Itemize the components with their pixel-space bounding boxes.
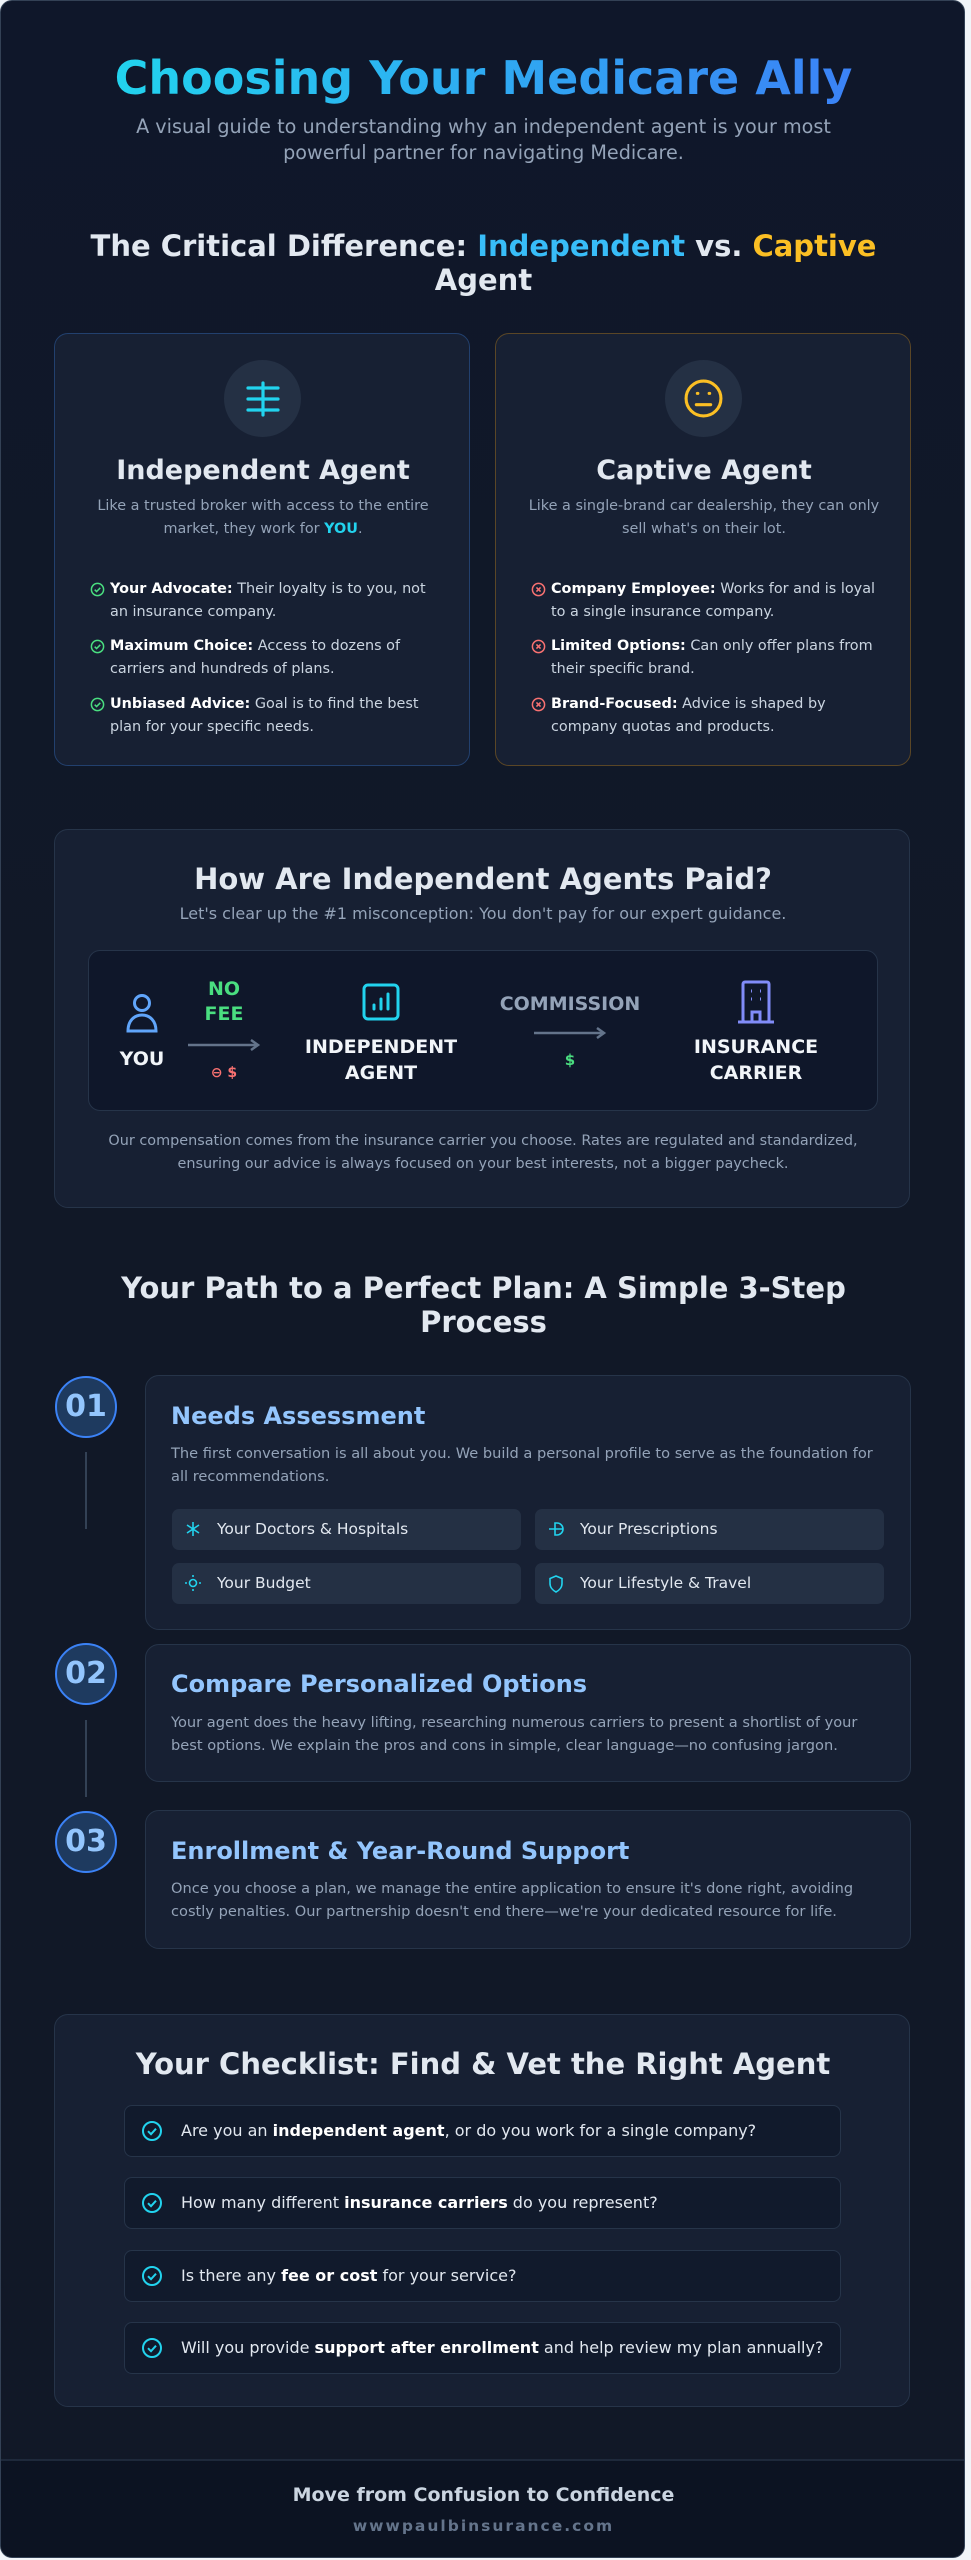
icon: independent — [224, 360, 301, 437]
step description: Once you choose a plan, we manage the entire application to ensure it's done right, avoiding costly penalties. Our partnership doesn't end there—we're your dedicated resource for life. — [171, 1880, 853, 1920]
heading: 3-step process: Your Path to a Perfect Plan: A Simple 3-Step Process — [121, 1271, 846, 1339]
checklist item 4: Will you provide support after enrollment and help review my plan annually? — [181, 2338, 823, 2357]
step 2 number — [55, 1643, 117, 1705]
no fee label — [205, 978, 243, 1025]
tile: prescriptions — [535, 1509, 884, 1550]
step 1 number: 01 — [65, 1389, 107, 1424]
icon: neutral face — [665, 360, 742, 437]
arrow — [188, 1039, 260, 1051]
step title: Needs Assessment — [171, 1402, 425, 1430]
step 2 card — [145, 1644, 911, 1782]
step title: Compare Personalized Options — [171, 1670, 587, 1698]
bullet list — [532, 581, 875, 734]
description: Like a single-brand car dealership, they can only sell what's on their lot. — [529, 498, 879, 536]
panel: captive agent — [495, 333, 911, 766]
step title: Enrollment & Year-Round Support — [171, 1837, 629, 1865]
explanation text: Our compensation comes from the insurance carrier you choose. Rates are regulated and standardized, ensuring our advice is always focused on your best interests, not a bigger paycheck. — [108, 1133, 858, 1172]
checklist item 2 — [124, 2177, 841, 2229]
bullet list: Company Employee: Works for and is loyal to a single insurance company. — [551, 581, 875, 620]
step 1 card — [145, 1375, 911, 1630]
footer url: wwwpaulbinsurance.com — [353, 2517, 614, 2535]
bullet list — [90, 581, 426, 734]
panel: how agents are paid — [54, 829, 910, 1208]
checklist item 3: Is there any fee or cost for your service? — [181, 2266, 516, 2285]
label: insurance carrier: CARRIER — [710, 1062, 802, 1084]
heading: How Are Independent Agents Paid? — [194, 862, 772, 896]
subheading: Let's clear up the #1 misconception: You don't pay for our expert guidance. — [180, 904, 786, 923]
tile: lifestyle: Your Lifestyle & Travel — [580, 1574, 751, 1592]
money icon: $ — [565, 1051, 575, 1069]
step 1 number — [55, 1376, 117, 1438]
step description: Your agent does the heavy lifting, researching numerous carriers to present a shortlist of your best options. We explain the pros and cons in simple, clear language—no confusing jargon. — [171, 1714, 857, 1754]
tile: budget: Your Budget — [217, 1574, 311, 1592]
label: independent agent: INDEPENDENT — [305, 1036, 457, 1058]
icon: person — [126, 994, 158, 1032]
footer tagline: Move from Confusion to Confidence — [293, 2484, 674, 2506]
no money icon: ⊖ $ — [211, 1065, 237, 1081]
tile: lifestyle — [535, 1563, 884, 1604]
checklist item 1 — [124, 2105, 841, 2157]
tile: budget — [172, 1563, 521, 1604]
label: insurance carrier — [694, 1036, 818, 1084]
tile: doctors: Your Doctors & Hospitals — [217, 1520, 408, 1538]
step 3 card — [145, 1810, 911, 1949]
bullet list: Brand-Focused: Advice is shaped by company quotas and products. — [551, 696, 826, 734]
commission label: COMMISSION — [500, 993, 640, 1015]
subtitle: A visual guide to understanding why an independent agent is your most powerful partner for navigating Medicare. — [136, 115, 831, 164]
label: insurance carrier: INSURANCE — [694, 1036, 818, 1058]
step 3 number — [55, 1811, 117, 1873]
bullet list: Unbiased Advice: Goal is to find the best plan for your specific needs. — [110, 696, 419, 734]
checklist item 1: Are you an independent agent, or do you work for a single company? — [181, 2121, 756, 2140]
footer — [1, 2459, 966, 2559]
label: you: YOU — [120, 1048, 164, 1070]
icon: building — [738, 980, 774, 1024]
no fee label: NO — [208, 978, 240, 1000]
label: independent agent — [305, 1036, 457, 1084]
checklist item 2: How many different insurance carriers do you represent? — [181, 2193, 658, 2212]
panel: independent agent — [54, 333, 470, 766]
icon: agent chart — [362, 984, 400, 1020]
card title: Captive Agent — [596, 455, 812, 486]
bullet list: Limited Options: Can only offer plans from their specific brand. — [551, 638, 873, 676]
label: independent agent: AGENT — [345, 1062, 417, 1084]
step 2 number: 02 — [65, 1656, 107, 1691]
bullet list: Your Advocate: Their loyalty is to you, not an insurance company. — [110, 581, 426, 620]
title: Choosing Your Medicare Ally — [115, 51, 852, 105]
checklist item 4 — [124, 2322, 841, 2374]
heading: critical difference: The Critical Difference: Independent vs. Captive Agent — [91, 229, 876, 297]
arrow — [534, 1027, 606, 1039]
bullet list: Maximum Choice: Access to dozens of carriers and hundreds of plans. — [110, 638, 400, 676]
no fee label: FEE — [205, 1003, 243, 1025]
tile: doctors — [172, 1509, 521, 1550]
checklist heading: Your Checklist: Find & Vet the Right Agent — [136, 2047, 830, 2081]
step description: The first conversation is all about you. We build a personal profile to serve as the foundation for all recommendations. — [171, 1445, 873, 1485]
checklist item 3 — [124, 2250, 841, 2302]
description: Like a trusted broker with access to the entire market, they work for YOU. — [97, 498, 429, 536]
flow diagram — [88, 950, 878, 1111]
card title: Independent Agent — [116, 455, 410, 486]
tile: prescriptions: Your Prescriptions — [580, 1520, 718, 1538]
step 3 number: 03 — [65, 1824, 107, 1859]
panel: checklist — [54, 2014, 910, 2407]
